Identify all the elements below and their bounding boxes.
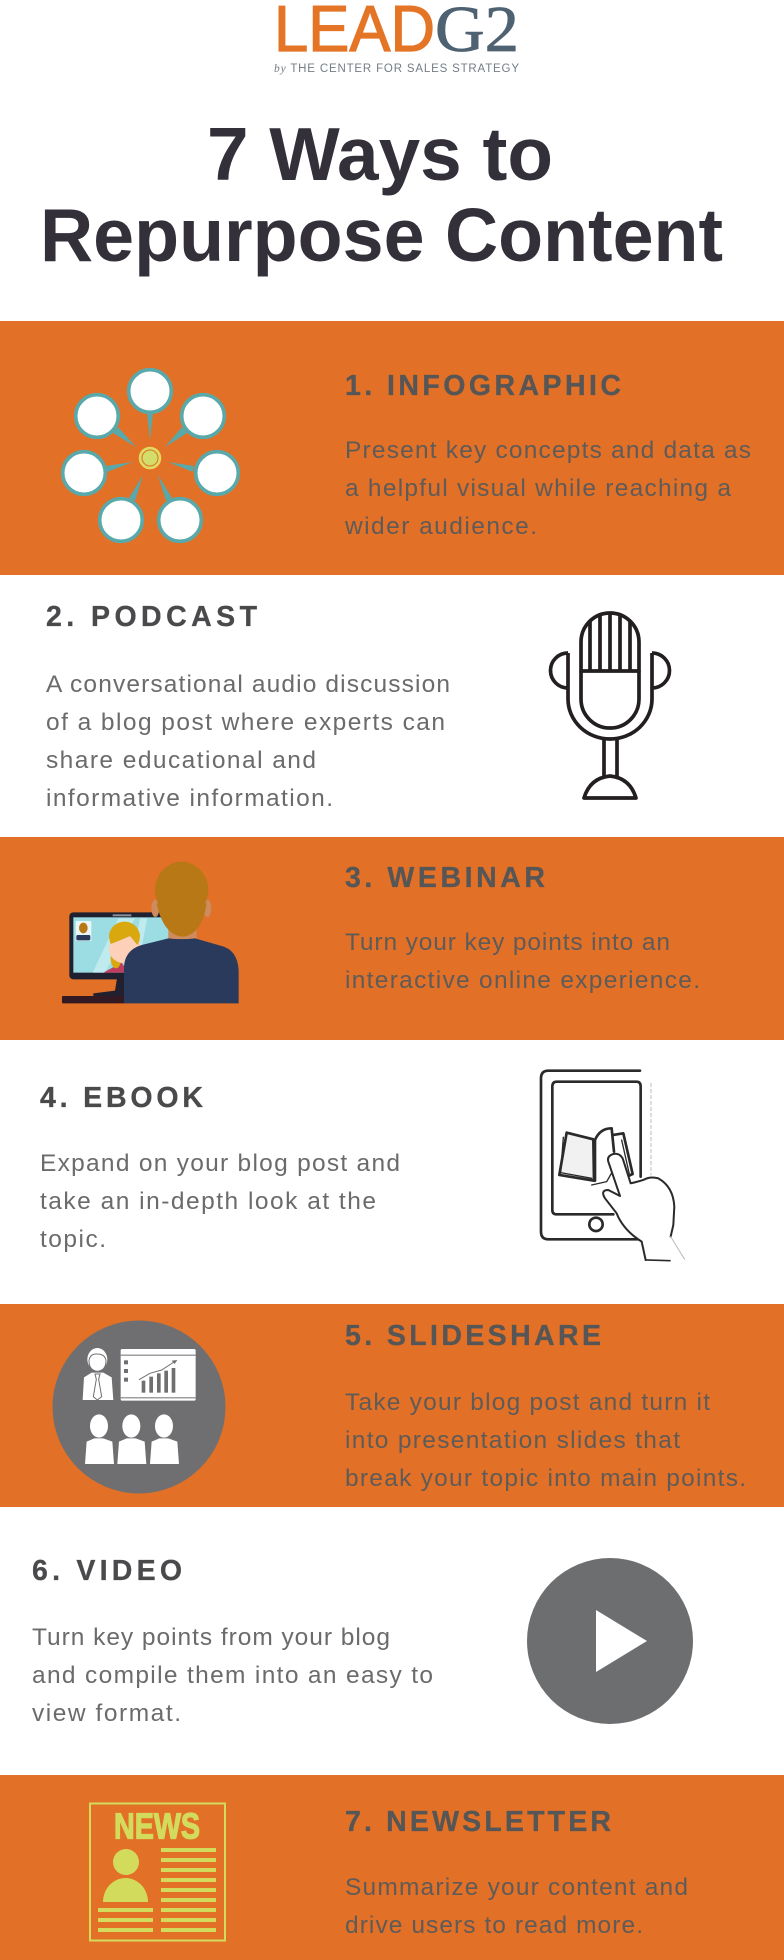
heading: infographic: 1. INFOGRAPHIC [345, 370, 621, 402]
logo: LeadG2 [274, 0, 519, 75]
heading: webinar: 3. WEBINAR [345, 862, 545, 894]
heading: slideshare: 5. SLIDESHARE [345, 1320, 601, 1352]
text: newsletter description [345, 1874, 688, 1939]
icon: microphone [550, 613, 670, 798]
text: podcast description [46, 671, 450, 812]
title: 7 Ways to [207, 112, 553, 196]
panel: 5 slideshare [0, 1304, 784, 1507]
icon: infographic hub [63, 370, 238, 541]
icon: tablet with book and hand [541, 1071, 685, 1261]
text: video description [32, 1624, 433, 1727]
text: webinar description [345, 929, 700, 994]
panel: 4 ebook [0, 1040, 784, 1304]
text: podcast description: A conversational audio discussion [46, 671, 450, 698]
icon: presentation audience [52, 1320, 226, 1494]
icon: newspaper [90, 1804, 225, 1940]
panel: 7 newsletter [0, 1775, 784, 1960]
panel: 3 webinar [0, 837, 784, 1040]
icon: play button [527, 1558, 693, 1724]
text: video description: Turn key points from your blog [32, 1624, 390, 1651]
heading: newsletter: 7. NEWSLETTER [345, 1806, 611, 1838]
audience figures [85, 1414, 179, 1464]
text: ebook description: topic. [40, 1226, 106, 1253]
text: newsletter description: Summarize your content and [345, 1874, 688, 1901]
text: slideshare description [345, 1389, 746, 1492]
text: video description: and compile them into an easy to [32, 1662, 433, 1689]
text: webinar description: Turn your key points into an [345, 929, 670, 956]
text: infographic description: Present key concepts and data as [345, 437, 751, 464]
text: infographic description: wider audience. [344, 513, 537, 540]
text: infographic description [344, 437, 751, 540]
panel: 1 infographic [0, 321, 784, 575]
text: webinar description: interactive online experience. [345, 967, 700, 994]
text: ebook description [40, 1150, 400, 1253]
panel: 6 video [0, 1507, 784, 1775]
title [40, 112, 723, 277]
text: ebook description: Expand on your blog post and [40, 1150, 400, 1177]
text: podcast description: share educational and [46, 747, 316, 774]
heading: ebook: 4. EBOOK [40, 1082, 203, 1114]
text: slideshare description: into presentation slides that [345, 1427, 680, 1454]
text: slideshare description: break your topic into main points. [345, 1465, 746, 1492]
icon: newspaper: NEWS [114, 1806, 200, 1846]
heading: podcast: 2. PODCAST [46, 601, 258, 633]
presenter figure [83, 1348, 113, 1400]
logo: LeadG2: by THE CENTER FOR SALES STRATEGY [274, 63, 519, 75]
icon: webinar viewer [62, 862, 239, 1003]
text: ebook description: take an in-depth look at the [40, 1188, 376, 1215]
title: Repurpose Content [40, 193, 723, 277]
panel: 2 podcast [0, 575, 784, 837]
text: infographic description: a helpful visual while reaching a [345, 475, 731, 502]
chart board [121, 1349, 196, 1401]
heading: video: 6. VIDEO [32, 1555, 182, 1587]
text: slideshare description: Take your blog post and turn it [345, 1389, 710, 1416]
text: podcast description: of a blog post where experts can [46, 709, 445, 736]
text: video description: view format. [32, 1700, 181, 1727]
text: newsletter description: drive users to read more. [345, 1912, 643, 1939]
text: podcast description: informative information. [46, 785, 333, 812]
